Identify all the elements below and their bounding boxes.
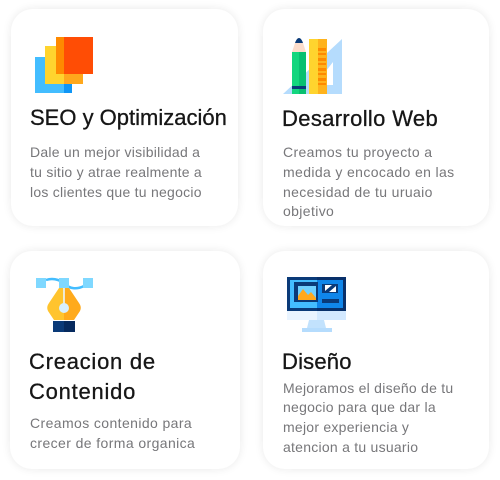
heading: Creacion de Contenido: Creacion de (29, 348, 156, 374)
text: SEO description (30, 144, 202, 200)
text: Diseño description: Mejoramos el diseño de tu (283, 380, 453, 396)
icon: desktop monitor (287, 277, 346, 332)
text: SEO description: los clientes que tu negocio (30, 184, 202, 200)
text: SEO description: tu sitio y atrae realmente a (30, 164, 202, 180)
icon: pencil and rulers (283, 38, 342, 94)
heading: Desarrollo Web: Desarrollo Web (282, 106, 438, 131)
panel: Creacion de Contenido (10, 251, 240, 469)
text: Diseño description: mejor experiencia y (283, 419, 409, 435)
text: Desarrollo description: objetivo (283, 203, 334, 219)
text: Desarrollo description: medida y encocado en las (283, 164, 455, 180)
heading: Creacion de Contenido: Contenido (29, 378, 136, 404)
text: Desarrollo description (283, 144, 455, 219)
text: SEO description: Dale un mejor visibilidad a (30, 144, 200, 160)
text: Diseño description (283, 380, 453, 455)
heading: SEO y Optimización: SEO y Optimización (30, 105, 227, 130)
heading: Creacion de Contenido (29, 348, 156, 404)
text: Diseño description: negocio para que dar la (283, 399, 436, 415)
text: Creacion description: Creamos contenido para (30, 415, 192, 431)
panel: SEO y Optimización (11, 9, 238, 226)
text: Creacion description (30, 415, 195, 451)
panel: Desarrollo Web (263, 9, 489, 226)
icon: pen tool nib (36, 278, 93, 332)
text: Creacion description: crecer de forma organica (30, 435, 195, 451)
heading: Diseño: Diseño (282, 348, 352, 374)
icon: stacked layers (35, 37, 93, 93)
text: Desarrollo description: Creamos tu proyecto a (283, 144, 432, 160)
text: Diseño description: atencion a tu usuario (283, 439, 418, 455)
text: Desarrollo description: necesidad de tu uruaio (283, 184, 433, 200)
panel: Diseño (263, 251, 489, 469)
